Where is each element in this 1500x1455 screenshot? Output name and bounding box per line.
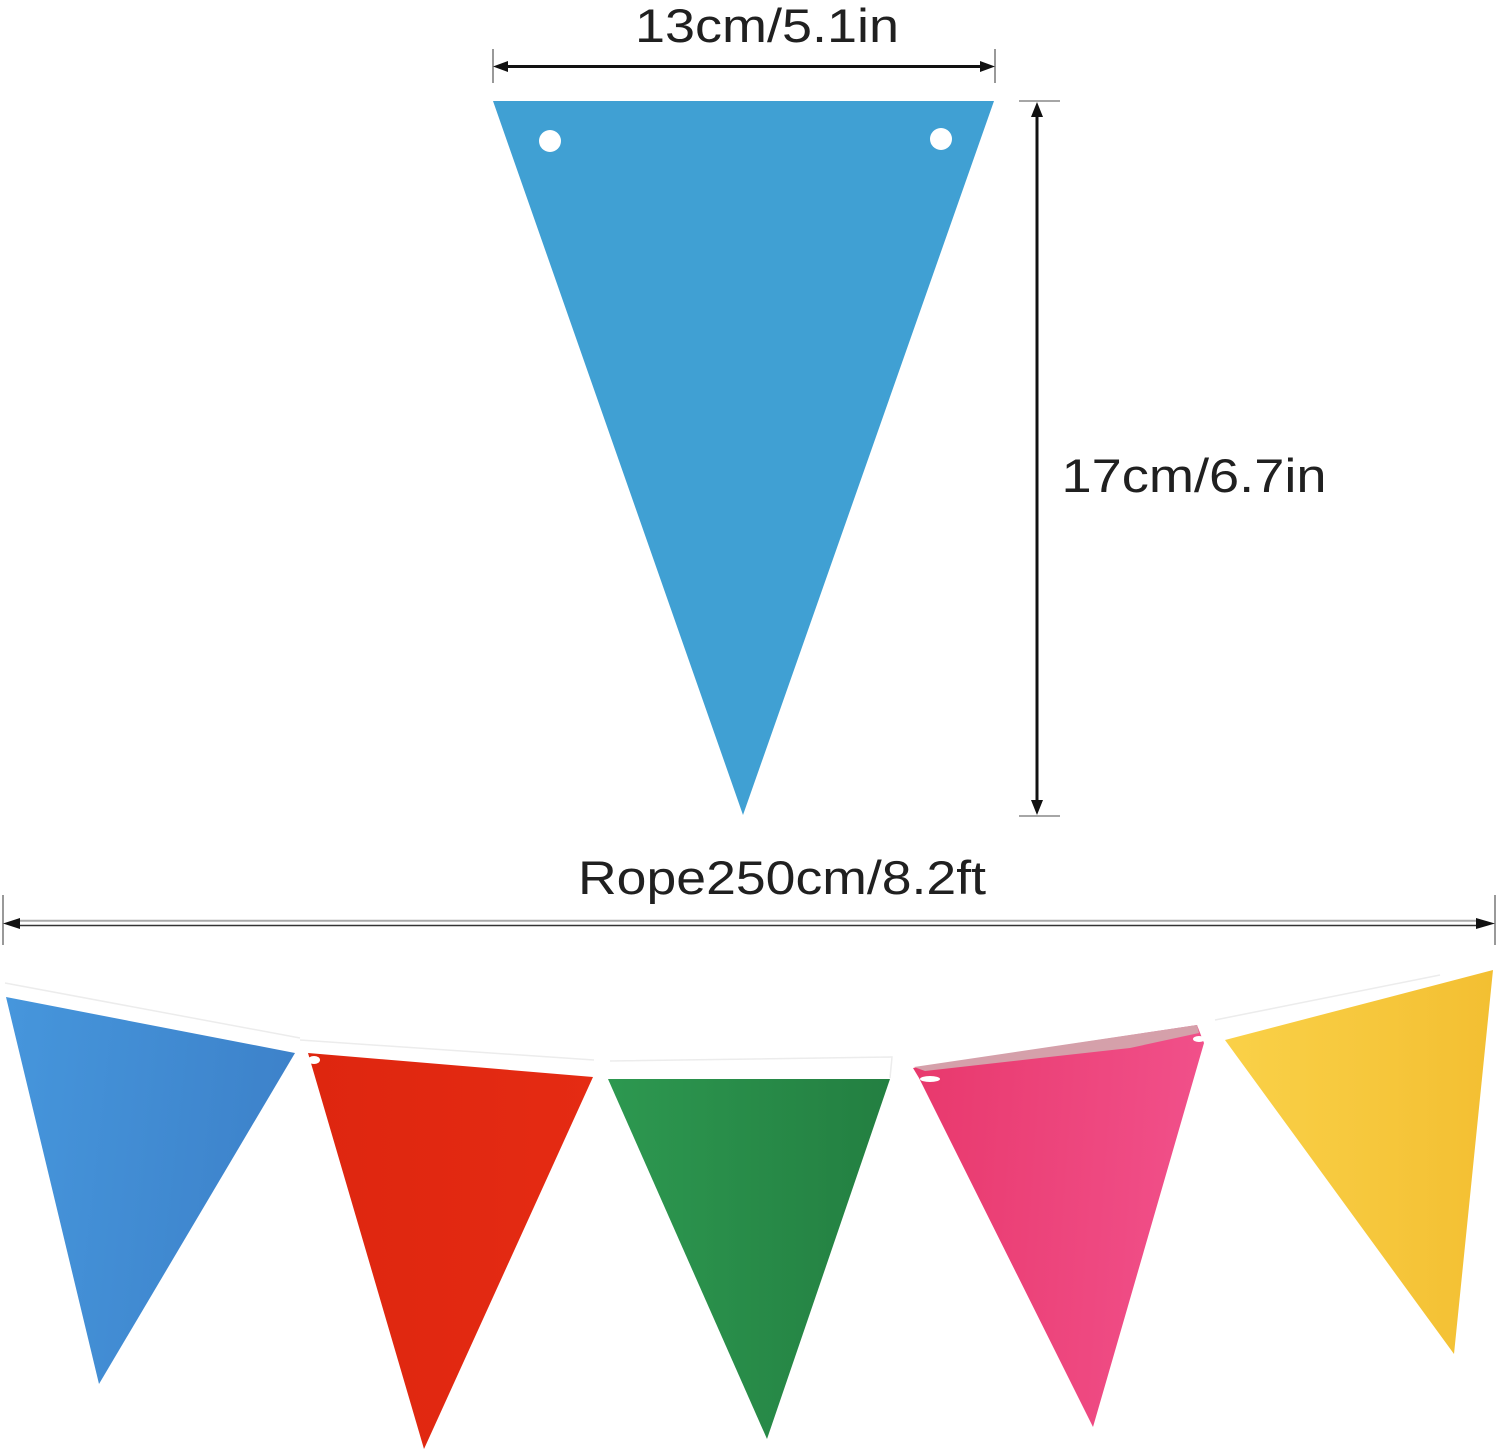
width label: 13cm/5.1in	[635, 0, 899, 52]
width dimension arrow	[493, 49, 995, 83]
rope dimension arrow	[3, 895, 1495, 945]
pink flag holes	[920, 1036, 1205, 1082]
red flag hole	[308, 1056, 320, 1064]
height dimension arrow	[1019, 101, 1060, 816]
bunting string of five flags	[5, 970, 1493, 1449]
flag: pink top fold	[914, 1025, 1199, 1071]
flag: pink	[913, 1025, 1204, 1427]
faint tape edges	[5, 975, 1440, 1078]
flag: yellow	[1225, 970, 1493, 1354]
rope length label: Rope250cm/8.2ft	[578, 851, 986, 904]
blue pennant with holes	[493, 101, 994, 815]
flag: red	[308, 1053, 593, 1449]
height label: 17cm/6.7in	[1062, 449, 1326, 502]
flag: blue	[6, 997, 295, 1384]
flag: green	[608, 1079, 890, 1439]
